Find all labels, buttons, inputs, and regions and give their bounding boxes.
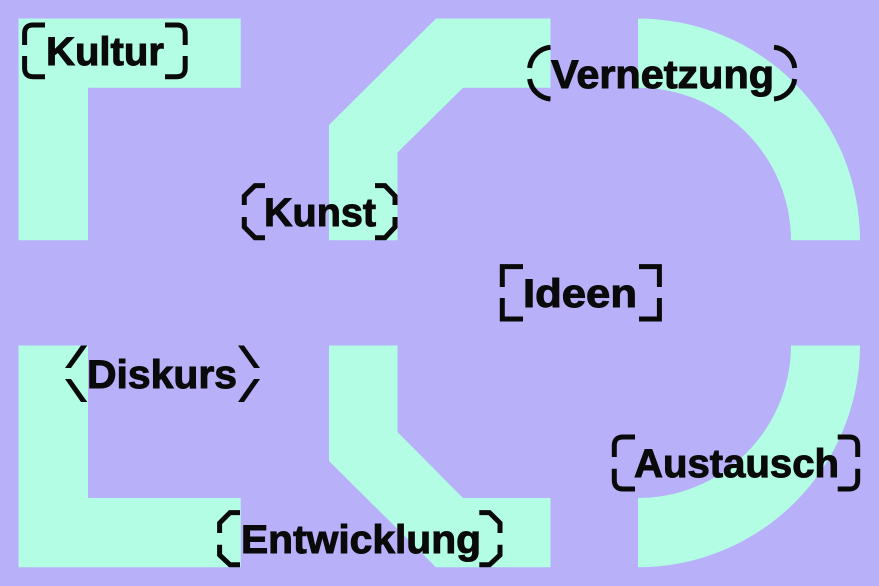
label: Ideen [502, 267, 659, 319]
shape: top-middle chamfered corner [329, 18, 550, 240]
label: Kultur: Kultur [46, 30, 164, 74]
label: Entwicklung: Entwicklung [241, 518, 481, 562]
shape: top-right quarter arc [638, 18, 860, 240]
shape: bottom-right quarter arc [638, 346, 860, 567]
label: Diskurs [65, 346, 260, 402]
label: Kunst: Kunst [264, 191, 376, 235]
shape: top-left corner [18, 18, 241, 240]
label: Ideen: Ideen [523, 272, 637, 316]
label: Kunst [244, 186, 395, 238]
label: Vernetzung: Vernetzung [551, 53, 774, 97]
label: Vernetzung [530, 47, 795, 99]
shape: bottom-left corner [18, 346, 241, 567]
label: Austausch: Austausch [634, 442, 839, 486]
label: Diskurs: Diskurs [87, 353, 237, 397]
shape: bottom-middle chamfered corner [329, 346, 550, 567]
label: Kultur [25, 25, 185, 77]
